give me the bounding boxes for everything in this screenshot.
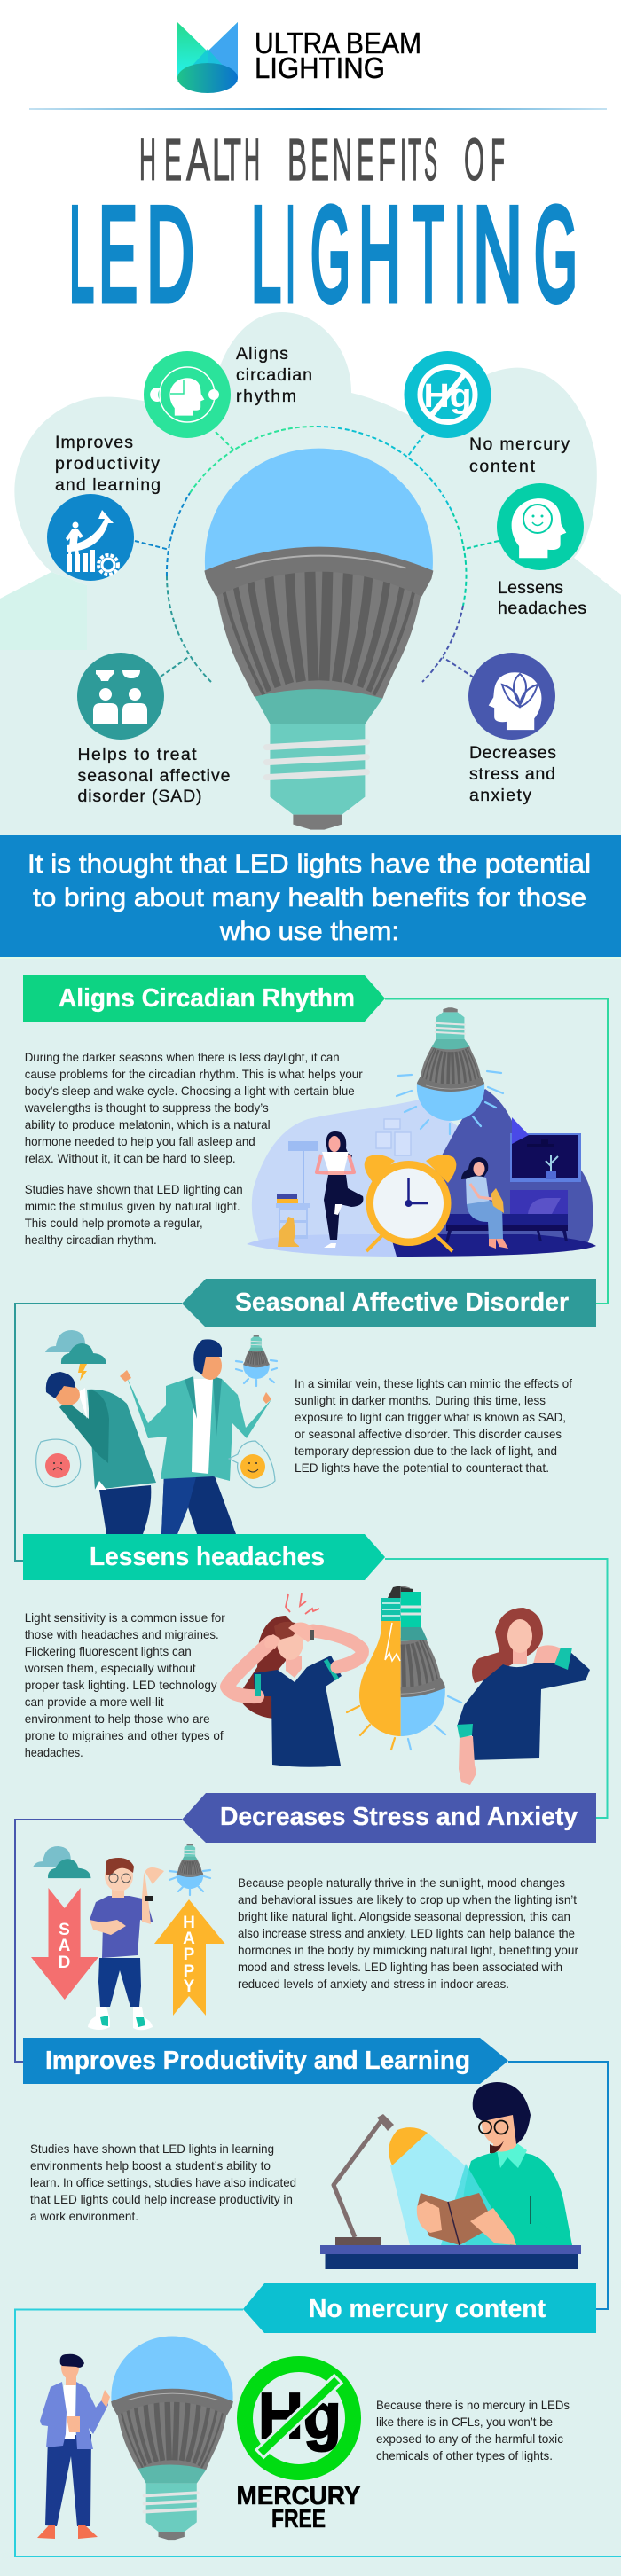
section text: reduced levels of anxiety and stress in indoor areas. (238, 1977, 509, 1991)
benefit: no mercury content (405, 351, 570, 476)
title: D (146, 179, 194, 330)
title: H (139, 127, 156, 193)
section text (295, 1376, 572, 1475)
section heading: Improves Productivity and Learning (45, 2047, 470, 2075)
title: L (212, 127, 230, 193)
sad arrow: S (59, 1921, 70, 1939)
happy arrow: P (184, 1962, 195, 1981)
section heading (182, 1793, 596, 1843)
illustration: woman with headache, split bulb, happy woman (227, 1586, 590, 1785)
title: G (310, 179, 350, 330)
section heading: Aligns Circadian Rhythm (59, 984, 355, 1013)
section text: healthy circadian rhythm. (25, 1233, 157, 1247)
section: decreases stress and anxiety (15, 1793, 596, 2062)
central LED bulb (204, 449, 433, 830)
section text: proper task lighting. LED technology (25, 1678, 217, 1692)
section text: Because people naturally thrive in the sunlight, mood changes (238, 1875, 565, 1890)
section heading: Lessens headaches (90, 1543, 325, 1571)
illustration: man reading under desk lamp (320, 2082, 581, 2269)
section text: relax. Without it, it can be hard to sleep. (25, 1151, 236, 1165)
title: O (464, 127, 484, 193)
section text: learn. In office settings, studies have also indicated (30, 2175, 296, 2189)
title: H (358, 179, 401, 330)
section text: exposure to light can trigger what is known as SAD, (295, 1410, 566, 1424)
brand logo (177, 22, 421, 93)
title: N (332, 127, 352, 193)
section text (24, 1610, 225, 1759)
section text: exposed to any of the harmful toxic (376, 2431, 563, 2446)
section: lessens headaches (23, 1534, 607, 1818)
section heading (23, 975, 385, 1022)
title: S (424, 127, 437, 193)
happy arrow: P (184, 1946, 195, 1964)
section text: Studies have shown that LED lighting can (25, 1182, 243, 1196)
section text: body’s sleep and wake cycle. Choosing a light with certain blue (25, 1084, 355, 1098)
section text: This could help promote a regular, (25, 1216, 203, 1230)
section text: that LED lights could help increase productivity in (30, 2192, 293, 2206)
illustration: man beside LED bulb (37, 2336, 233, 2540)
icon: no mercury sign: Hg (258, 2381, 342, 2452)
sad arrow: D (59, 1954, 70, 1972)
title: T (408, 127, 421, 193)
title: A (186, 127, 210, 193)
happy arrow: H (183, 1914, 195, 1932)
intro banner: It is thought that LED lights have the potential (28, 850, 591, 879)
benefit: no mercury content: content (469, 457, 536, 476)
title (69, 127, 578, 330)
benefit: aligns circadian rhythm: rhythm (236, 387, 296, 406)
benefit: decreases stress and anxiety: Decreases (469, 743, 556, 763)
section text: environment to help those who are (25, 1711, 210, 1726)
benefit: improves productivity and learning: and learning (55, 475, 161, 495)
title: N (473, 179, 523, 330)
section text: Flickering fluorescent lights can (25, 1644, 192, 1658)
title: L (251, 179, 281, 330)
section text: wavelengths is thought to suppress the body’s (24, 1100, 269, 1115)
section text: those with headaches and migraines. (25, 1627, 219, 1641)
section text: mood and stress levels. LED lighting has been associated with (238, 1960, 562, 1974)
title: I (454, 179, 466, 330)
illustration: day and night room with clock (247, 1007, 596, 1257)
section text: Because there is no mercury in LEDs (376, 2398, 570, 2412)
title: E (164, 127, 182, 193)
section: no mercury content (15, 2283, 621, 2556)
benefit: lessens headaches: Lessens (498, 578, 563, 598)
section text (30, 2141, 296, 2223)
title: E (357, 127, 374, 193)
benefit: aligns circadian rhythm: circadian (236, 365, 312, 385)
benefit: helps to treat SAD: disorder (SAD) (78, 787, 202, 806)
section text: cause problems for the circadian rhythm. This is what helps your (25, 1067, 363, 1081)
happy arrow (154, 1899, 225, 2016)
title: I (400, 127, 406, 193)
section text: and behavioral issues are likely to crop up when the lighting isn’t (238, 1892, 577, 1907)
happy arrow: Y (184, 1977, 195, 1996)
section heading (23, 2038, 508, 2084)
benefit: decreases stress and anxiety: stress and (469, 764, 555, 784)
section text: hormone needed to help you fall asleep and (25, 1134, 255, 1148)
section text: During the darker seasons when there is less daylight, it can (25, 1050, 340, 1064)
intro banner: who use them: (219, 917, 399, 946)
title: T (413, 179, 444, 330)
page background (0, 650, 621, 2576)
section text (24, 1050, 363, 1247)
section: aligns circadian rhythm (23, 975, 608, 1304)
section heading (243, 2283, 596, 2333)
section text: prone to migraines and other types of (25, 1728, 224, 1742)
benefit: helps to treat SAD (77, 653, 231, 806)
section text: Studies have shown that LED lights in learning (30, 2141, 274, 2156)
benefit: lessens headaches (497, 483, 586, 618)
section text: In a similar vein, these lights can mimic the effects of (295, 1376, 572, 1390)
icon: no mercury sign: MERCURY (236, 2482, 360, 2510)
title: B (287, 127, 307, 193)
section: improves productivity and learning (23, 2038, 608, 2309)
benefit: aligns circadian rhythm: Aligns (236, 344, 288, 364)
benefit: improves productivity and learning (47, 433, 161, 581)
section text: chemicals of other types of lights. (376, 2448, 553, 2462)
title: H (244, 127, 260, 193)
benefit: aligns circadian rhythm (144, 344, 312, 438)
happy arrow: A (183, 1930, 195, 1948)
title: I (286, 179, 295, 330)
section text: ability to produce melatonin, which is a natural (25, 1117, 271, 1131)
title: T (224, 127, 241, 193)
benefit: lessens headaches: headaches (498, 599, 586, 618)
section text: mimic the stimulus given by natural light. (25, 1199, 240, 1213)
sad arrow: A (59, 1937, 71, 1955)
section text: hormones in the body by mimicking natural light, benefiting your (238, 1943, 578, 1957)
section text: or seasonal affective disorder. This disorder causes (295, 1427, 562, 1441)
brand logo: LIGHTING (255, 51, 385, 84)
section heading (182, 1279, 596, 1327)
cloud backdrop (0, 312, 621, 650)
brand logo: ULTRA BEAM (255, 27, 421, 59)
night window (510, 1117, 581, 1182)
benefit: helps to treat SAD: Helps to treat (78, 745, 197, 764)
section text: headaches. (25, 1745, 83, 1759)
dashed arc around bulb (135, 427, 499, 682)
intro banner: to bring about many health benefits for those (33, 883, 586, 912)
benefit: no mercury content: No mercury (469, 435, 570, 454)
section text: a work environment. (30, 2209, 138, 2223)
section text: LED lights have the potential to counteract that. (295, 1460, 549, 1475)
illustration: stressed man with sad and happy arrows (31, 1844, 225, 2030)
section text: sunlight in darker months. During this time, less (295, 1393, 546, 1407)
benefit: improves productivity and learning: productivity (55, 454, 160, 474)
title: E (98, 179, 138, 330)
sad arrow (31, 1888, 98, 2000)
section text: also increase stress and anxiety. LED lights can help balance the (238, 1926, 575, 1940)
title: L (69, 179, 94, 330)
section text: bright like natural light. Alongside seasonal depression, this can (238, 1909, 570, 1923)
section: seasonal affective disorder (15, 1279, 596, 1561)
section text: can provide a more well-lit (25, 1695, 164, 1709)
section text: temporary depression due to the lack of light, and (295, 1444, 557, 1458)
section heading: Decreases Stress and Anxiety (220, 1803, 578, 1831)
section heading: Seasonal Affective Disorder (235, 1288, 569, 1317)
benefit: decreases stress and anxiety: anxiety (469, 786, 531, 805)
benefit: decreases stress and anxiety (468, 653, 556, 805)
benefit: helps to treat SAD: seasonal affective (78, 766, 231, 786)
section text: worsen them, especially without (24, 1661, 196, 1675)
illustration: sad man and happy man (36, 1330, 277, 1534)
section heading: No mercury content (309, 2295, 546, 2323)
benefit: improves productivity and learning: Improves (55, 433, 133, 452)
section text: like there is in CFLs, you won’t be (376, 2415, 553, 2429)
intro banner (0, 835, 621, 957)
benefit: no mercury content: Hg (424, 378, 472, 415)
icon: no mercury sign (236, 2364, 360, 2533)
title: E (310, 127, 329, 193)
section text: Light sensitivity is a common issue for (25, 1610, 225, 1625)
title: F (491, 127, 505, 193)
section heading (23, 1534, 385, 1580)
icon: no mercury sign: FREE (271, 2505, 326, 2533)
section text (376, 2398, 570, 2462)
section text: environments help boost a student’s ability to (30, 2158, 271, 2173)
title: F (378, 127, 396, 193)
section text (238, 1875, 578, 1991)
